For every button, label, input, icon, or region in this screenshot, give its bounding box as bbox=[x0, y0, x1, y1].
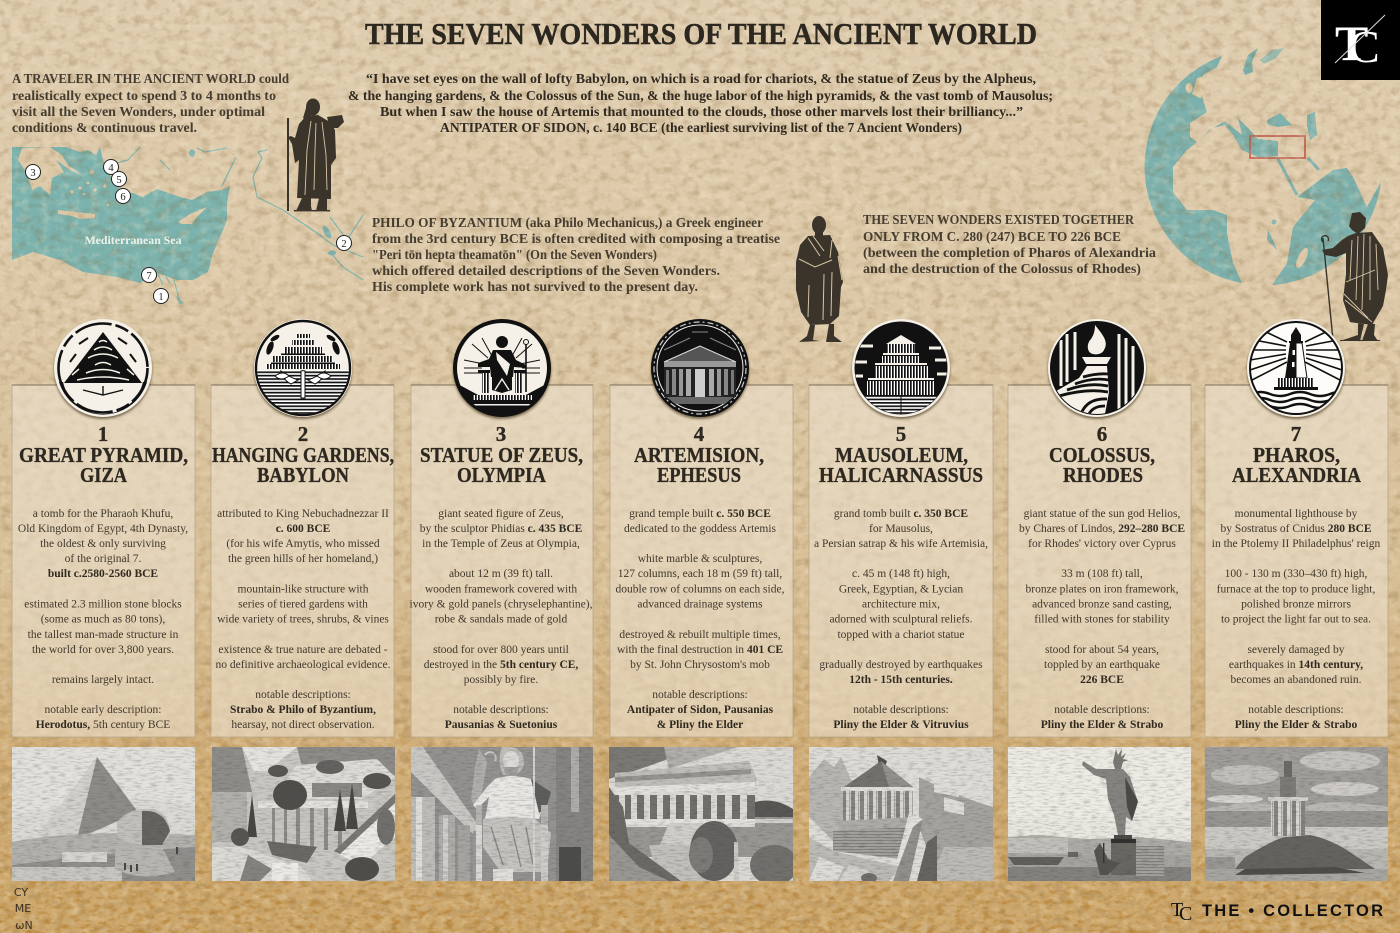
text: wonders existed together: and the destruction of the Colossus of Rhodes) bbox=[863, 261, 1141, 276]
description: Artemision: advanced drainage systems bbox=[637, 599, 763, 611]
description: Pharos bbox=[1212, 508, 1380, 731]
description: Colossus: giant statue of the sun god Helios, bbox=[1024, 508, 1181, 520]
description: Great Pyramid: estimated 2.3 million stone blocks bbox=[24, 599, 182, 611]
description: Great Pyramid: the tallest man-made structure in bbox=[28, 629, 179, 641]
description: Statue of Zeus: possibly by fire. bbox=[464, 674, 538, 686]
description: Statue of Zeus: Pausanias & Suetonius bbox=[445, 719, 558, 731]
footer logo: The Collector: T bbox=[1171, 899, 1183, 921]
description: Artemision: with the final destruction in 401 CE bbox=[617, 644, 783, 656]
description: Hanging Gardens: attributed to King Nebuchadnezzar II bbox=[217, 508, 389, 520]
map markers 1 to 7: 4 bbox=[108, 163, 114, 174]
description: Colossus: 226 BCE bbox=[1080, 674, 1124, 686]
heading: Artemision bbox=[634, 422, 764, 487]
panel 7: Pharos bbox=[1205, 385, 1388, 737]
description: Great Pyramid bbox=[18, 508, 188, 731]
description: Pharos: by Sostratus of Cnidus 280 BCE bbox=[1220, 523, 1372, 535]
logo: TC black square bbox=[1321, 0, 1400, 80]
image: Mausoleum engraving bbox=[809, 747, 993, 883]
logo: TC black square: C bbox=[1349, 21, 1380, 72]
description: Artemision: 127 columns, each 18 m (59 ft) tall, bbox=[618, 568, 782, 580]
panel 4: Artemision bbox=[610, 385, 793, 737]
icon: Zeus medallion bbox=[453, 319, 551, 417]
engraving tone overlay bbox=[12, 747, 1388, 881]
quote: Antipater of Sidon: But when I saw the house of Artemis that mounted to the clouds, those other marvels lost their brilliancy...” bbox=[380, 104, 1023, 119]
description: Hanging Gardens: c. 600 BCE bbox=[276, 523, 331, 535]
description: Pharos: becomes an abandoned ruin. bbox=[1231, 674, 1362, 686]
description: Mausoleum: 12th - 15th centuries. bbox=[849, 674, 953, 686]
image: Great Pyramid and Sphinx engraving bbox=[12, 747, 195, 881]
heading: Colossus bbox=[1049, 422, 1155, 487]
map markers 1 to 7: 5 bbox=[116, 175, 122, 186]
intro: traveler note: A TRAVELER IN THE ANCIENT WORLD could bbox=[12, 71, 289, 86]
heading: Mausoleum bbox=[819, 422, 983, 487]
description: Statue of Zeus: wooden framework covered with bbox=[425, 584, 577, 596]
description: Hanging Gardens: series of tiered gardens with bbox=[238, 599, 368, 611]
description: Colossus: stood for about 54 years, bbox=[1045, 644, 1159, 656]
footer logo: The Collector: THE • COLLECTOR bbox=[1202, 902, 1383, 920]
description: Hanging Gardens: notable descriptions: bbox=[255, 689, 351, 701]
panel 2: Hanging Gardens bbox=[211, 385, 394, 737]
image: Temple of Artemis engraving bbox=[609, 747, 798, 885]
description: Hanging Gardens: hearsay, not direct observation. bbox=[231, 719, 375, 731]
description: Statue of Zeus: about 12 m (39 ft) tall. bbox=[449, 568, 553, 580]
text: wonders existed together: ONLY FROM C. 280 (247) BCE TO 226 BCE bbox=[863, 229, 1121, 244]
description: Colossus: by Chares of Lindos, 292–280 BCE bbox=[1019, 523, 1185, 535]
map markers 1 to 7: 1 bbox=[158, 292, 164, 303]
figure: man in toga bbox=[796, 216, 843, 342]
footer logo: The Collector bbox=[1171, 899, 1383, 925]
description: Artemision: Antipater of Sidon, Pausanias bbox=[627, 704, 774, 716]
heading: Artemision: 4 bbox=[694, 422, 705, 446]
text: Philo of Byzantium: His complete work has not survived to the present day. bbox=[372, 279, 698, 294]
description: Mausoleum bbox=[814, 508, 988, 731]
description: Colossus: advanced bronze sand casting, bbox=[1032, 599, 1172, 611]
description: Colossus: for Rhodes' victory over Cyprus bbox=[1028, 538, 1176, 550]
description: Artemision: by St. John Chrysostom's mob bbox=[630, 659, 770, 671]
heading: Statue of Zeus: STATUE OF ZEUS, bbox=[420, 443, 583, 467]
description: Statue of Zeus: destroyed in the 5th century CE, bbox=[424, 659, 578, 671]
footer logo: The Collector: C bbox=[1179, 903, 1192, 925]
panel 1: Great Pyramid bbox=[12, 385, 195, 737]
description: Mausoleum: architecture mix, bbox=[862, 599, 940, 611]
description: Artemision bbox=[616, 508, 785, 731]
description: Pharos: polished bronze mirrors bbox=[1241, 599, 1351, 611]
map: eastern Mediterranean bbox=[12, 147, 363, 304]
description: Colossus: toppled by an earthquake bbox=[1044, 659, 1160, 671]
description: Mausoleum: c. 45 m (148 ft) high, bbox=[852, 568, 950, 580]
description: Pharos: furnace at the top to produce light, bbox=[1217, 584, 1375, 596]
description: Statue of Zeus: ivory & gold panels (chryselephantine), bbox=[410, 599, 593, 611]
description: Colossus bbox=[1019, 508, 1185, 731]
description: Great Pyramid: (some as much as 80 tons), bbox=[41, 614, 165, 626]
heading: Hanging Gardens: BABYLON bbox=[257, 463, 349, 487]
signature: ME bbox=[15, 902, 31, 915]
panel 3: Statue of Zeus bbox=[410, 385, 593, 737]
description: Hanging Gardens: no definitive archaeological evidence. bbox=[216, 659, 391, 671]
text: Philo of Byzantium: "Peri tōn hepta theamatōn" (On the Seven Wonders) bbox=[372, 247, 657, 262]
heading: Artemision: EPHESUS bbox=[657, 463, 741, 487]
image: Pharos of Alexandria engraving bbox=[1205, 747, 1388, 881]
map markers 1 to 7: 2 bbox=[341, 239, 347, 250]
description: Statue of Zeus: in the Temple of Zeus at Olympia, bbox=[422, 538, 580, 550]
description: Statue of Zeus: stood for over 800 years until bbox=[433, 644, 569, 656]
signature: CY bbox=[14, 886, 28, 899]
heading: Mausoleum: HALICARNASSUS bbox=[819, 463, 983, 487]
image: Colossus of Rhodes engraving bbox=[1008, 747, 1191, 881]
text: wonders existed together: THE SEVEN WONDERS EXISTED TOGETHER bbox=[863, 212, 1134, 227]
map markers 1 to 7 bbox=[26, 160, 352, 304]
description: Mausoleum: gradually destroyed by earthquakes bbox=[819, 659, 983, 671]
description: Great Pyramid: the world for over 3,800 years. bbox=[32, 644, 174, 656]
description: Pharos: earthquakes in 14th century, bbox=[1229, 659, 1363, 671]
text: wonders existed together bbox=[863, 212, 1156, 276]
description: Colossus: notable descriptions: bbox=[1054, 704, 1150, 716]
description: Pharos: monumental lighthouse by bbox=[1235, 508, 1358, 520]
description: Great Pyramid: Herodotus, 5th century BCE bbox=[36, 719, 170, 731]
description: Mausoleum: grand tomb built c. 350 BCE bbox=[834, 508, 968, 520]
heading: Hanging Gardens: HANGING GARDENS, bbox=[212, 443, 394, 467]
description: Mausoleum: adorned with sculptural reliefs. bbox=[829, 614, 973, 626]
intro: traveler note: visit all the Seven Wonders, under optimal bbox=[12, 104, 265, 119]
image: Hanging Gardens engraving bbox=[212, 747, 395, 881]
heading: Pharos bbox=[1232, 422, 1362, 487]
text: Philo of Byzantium: PHILO OF BYZANTIUM (aka Philo Mechanicus,) a Greek engineer bbox=[372, 215, 763, 230]
icon: pyramid medallion bbox=[54, 319, 152, 417]
panel 6: Colossus bbox=[1008, 385, 1191, 737]
heading: Great Pyramid: GREAT PYRAMID, bbox=[19, 443, 188, 467]
description: Statue of Zeus bbox=[410, 508, 593, 731]
intro: traveler note: realistically expect to spend 3 to 4 months to bbox=[12, 88, 276, 103]
red location frame bbox=[1250, 136, 1305, 158]
description: Statue of Zeus: by the sculptor Phidias c. 435 BCE bbox=[420, 523, 583, 535]
icon: lighthouse medallion bbox=[1247, 319, 1350, 417]
description: Mausoleum: Greek, Egyptian, & Lycian bbox=[839, 584, 963, 596]
description: Pharos: in the Ptolemy II Philadelphus' reign bbox=[1212, 538, 1380, 550]
heading: Statue of Zeus: 3 bbox=[496, 422, 506, 446]
description: Statue of Zeus: notable descriptions: bbox=[453, 704, 549, 716]
description: Artemision: white marble & sculptures, bbox=[638, 553, 762, 565]
heading: Mausoleum: 5 bbox=[896, 422, 906, 446]
heading: Colossus: RHODES bbox=[1063, 463, 1143, 487]
icon: gardens medallion bbox=[254, 319, 352, 417]
description: Mausoleum: for Mausolus, bbox=[869, 523, 933, 535]
description: Great Pyramid: remains largely intact. bbox=[52, 674, 154, 686]
image: Statue of Zeus engraving bbox=[411, 747, 593, 881]
heading: Statue of Zeus bbox=[420, 422, 583, 487]
description: Hanging Gardens: existence & true nature are debated - bbox=[218, 644, 388, 656]
icon: mausoleum medallion bbox=[852, 319, 950, 417]
map markers 1 to 7: 3 bbox=[30, 168, 36, 179]
heading: Pharos: ALEXANDRIA bbox=[1232, 463, 1362, 487]
description: Colossus: filled with stones for stability bbox=[1034, 614, 1170, 626]
text: Philo of Byzantium: from the 3rd century BCE is often credited with composing a treatise bbox=[372, 231, 780, 246]
heading: Statue of Zeus: OLYMPIA bbox=[457, 463, 547, 487]
intro: traveler note: conditions & continuous travel. bbox=[12, 120, 197, 135]
quote: Antipater of Sidon: ANTIPATER OF SIDON, c. 140 BCE (the earliest surviving list of the 7 Ancient Wonders) bbox=[440, 120, 962, 135]
description: Pharos: 100 - 130 m (330–430 ft) high, bbox=[1225, 568, 1368, 580]
heading: Great Pyramid bbox=[19, 422, 188, 487]
description: Great Pyramid: a tomb for the Pharaoh Khufu, bbox=[33, 508, 173, 520]
description: Hanging Gardens bbox=[216, 508, 391, 731]
description: Artemision: grand temple built c. 550 BCE bbox=[629, 508, 771, 520]
heading: Pharos: PHAROS, bbox=[1253, 443, 1340, 467]
heading: Hanging Gardens bbox=[212, 422, 394, 487]
map markers 1 to 7: 6 bbox=[120, 192, 126, 203]
map label: Mediterranean Sea bbox=[84, 235, 182, 247]
title: THE SEVEN WONDERS OF THE ANCIENT WORLD bbox=[365, 16, 1037, 51]
description: Statue of Zeus: giant seated figure of Zeus, bbox=[438, 508, 564, 520]
description: Great Pyramid: Old Kingdom of Egypt, 4th Dynasty, bbox=[18, 523, 188, 535]
figure: traveler with staff bbox=[287, 98, 344, 211]
heading: Great Pyramid: GIZA bbox=[80, 463, 128, 487]
description: Colossus: bronze plates on iron framework, bbox=[1026, 584, 1179, 596]
heading: Colossus: 6 bbox=[1097, 422, 1107, 446]
icon: Colossus torch medallion bbox=[1048, 319, 1146, 417]
description: Colossus: Pliny the Elder & Strabo bbox=[1041, 719, 1163, 731]
signature: ωN bbox=[15, 919, 33, 932]
heading: Colossus: COLOSSUS, bbox=[1049, 443, 1155, 467]
description: Artemision: double row of columns on each side, bbox=[616, 584, 785, 596]
description: Hanging Gardens: the green hills of her homeland,) bbox=[228, 553, 378, 565]
description: Hanging Gardens: (for his wife Amytis, who missed bbox=[226, 538, 380, 550]
logo: TC black square: T bbox=[1335, 15, 1368, 71]
map markers 1 to 7: 7 bbox=[146, 271, 152, 282]
description: Artemision: destroyed & rebuilt multiple times, bbox=[619, 629, 781, 641]
description: Great Pyramid: built c.2580-2560 BCE bbox=[48, 568, 158, 580]
description: Artemision: & Pliny the Elder bbox=[657, 719, 743, 731]
intro: traveler note bbox=[12, 71, 289, 135]
description: Pharos: severely damaged by bbox=[1247, 644, 1345, 656]
icon: Artemis temple medallion bbox=[651, 319, 749, 417]
panel 5: Mausoleum bbox=[809, 385, 993, 737]
figure: orator with crook bbox=[1322, 212, 1388, 341]
heading: Hanging Gardens: 2 bbox=[298, 422, 308, 446]
signature bbox=[14, 886, 33, 932]
description: Statue of Zeus: robe & sandals made of gold bbox=[435, 614, 568, 626]
description: Mausoleum: Pliny the Elder & Vitruvius bbox=[833, 719, 969, 731]
quote: Antipater of Sidon: “I have set eyes on the wall of lofty Babylon, on which is a road for chariots, & the statue of Zeus by the Alpheus, bbox=[366, 71, 1036, 86]
heading: Mausoleum: MAUSOLEUM, bbox=[835, 443, 968, 467]
heading: Pharos: 7 bbox=[1291, 422, 1301, 446]
description: Mausoleum: notable descriptions: bbox=[853, 704, 949, 716]
text: wonders existed together: (between the completion of Pharos of Alexandria bbox=[863, 245, 1156, 260]
world globe bbox=[1145, 48, 1381, 285]
heading: Artemision: ARTEMISION, bbox=[634, 443, 764, 467]
description: Mausoleum: topped with a chariot statue bbox=[837, 629, 965, 641]
description: Great Pyramid: notable early description: bbox=[45, 704, 161, 716]
description: Pharos: notable descriptions: bbox=[1248, 704, 1344, 716]
description: Mausoleum: a Persian satrap & his wife Artemisia, bbox=[814, 538, 988, 550]
description: Hanging Gardens: wide variety of trees, shrubs, & vines bbox=[217, 614, 389, 626]
description: Hanging Gardens: mountain-like structure with bbox=[238, 584, 369, 596]
description: Artemision: notable descriptions: bbox=[652, 689, 748, 701]
text: Philo of Byzantium bbox=[372, 215, 780, 294]
heading: Great Pyramid: 1 bbox=[98, 422, 108, 446]
description: Hanging Gardens: Strabo & Philo of Byzantium, bbox=[230, 704, 376, 716]
description: Pharos: Pliny the Elder & Strabo bbox=[1235, 719, 1357, 731]
quote: Antipater of Sidon bbox=[348, 71, 1053, 135]
description: Artemision: dedicated to the goddess Artemis bbox=[624, 523, 777, 535]
text: Philo of Byzantium: which offered detailed descriptions of the Seven Wonders. bbox=[372, 263, 720, 278]
description: Pharos: to project the light far out to sea. bbox=[1221, 614, 1371, 626]
description: Colossus: 33 m (108 ft) tall, bbox=[1061, 568, 1143, 580]
description: Great Pyramid: the oldest & only surviving bbox=[40, 538, 166, 550]
quote: Antipater of Sidon: & the hanging gardens, & the Colossus of the Sun, & the huge labor of the high pyramids, & the vast tomb of Mausolus; bbox=[348, 88, 1053, 103]
description: Great Pyramid: of the original 7. bbox=[65, 553, 141, 565]
